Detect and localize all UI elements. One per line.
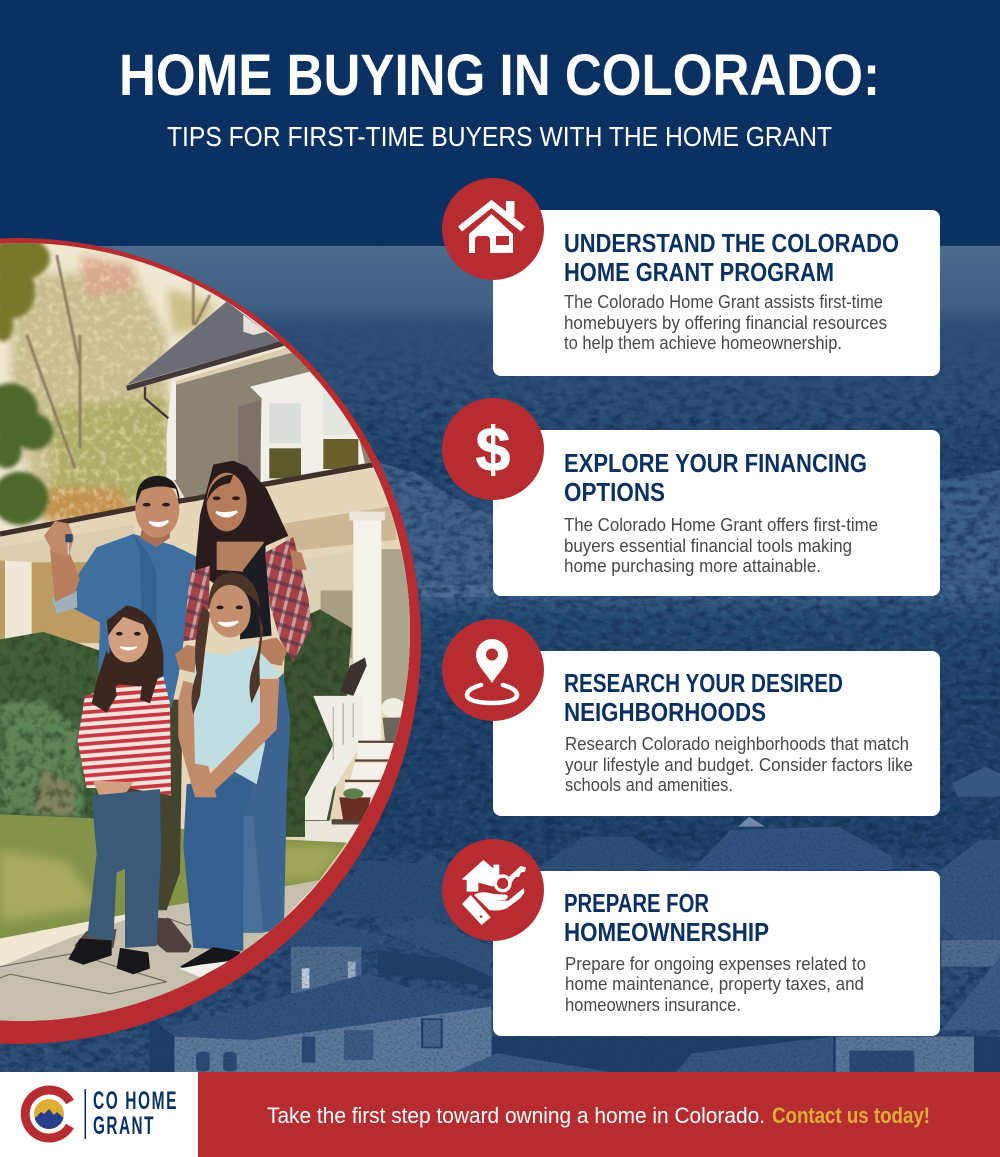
body text: your lifestyle and budget. Consider factors like <box>565 755 913 775</box>
body text <box>564 515 878 576</box>
heading <box>564 228 899 287</box>
heading: UNDERSTAND THE COLORADO <box>564 228 899 258</box>
icon badge: map pin <box>442 619 544 721</box>
heading: RESEARCH YOUR DESIRED <box>564 668 843 698</box>
body text: home maintenance, property taxes, and <box>565 974 864 994</box>
header band <box>0 0 1000 246</box>
heading: EXPLORE YOUR FINANCING <box>564 448 867 478</box>
photo ring <box>0 238 421 1044</box>
logo wordmark: CO HOME <box>93 1087 178 1115</box>
panel: financing options <box>442 398 940 596</box>
body text: Prepare for ongoing expenses related to <box>565 954 866 974</box>
logo mark <box>25 1090 70 1138</box>
family photo in circular frame <box>0 237 430 1040</box>
panel: prepare for homeownership <box>442 839 940 1036</box>
body text <box>564 292 887 353</box>
heading: OPTIONS <box>564 477 665 507</box>
panel: research neighborhoods <box>442 619 940 816</box>
body text: schools and amenities. <box>565 775 733 795</box>
icon badge: dollar sign: $ <box>476 416 510 485</box>
icon badge: house <box>442 178 544 280</box>
body text: home purchasing more attainable. <box>564 556 821 576</box>
logo wordmark: GRANT <box>93 1112 155 1140</box>
footer: logo <box>0 1072 198 1157</box>
footer: call to action <box>198 1072 1000 1157</box>
icon badge: house key in hand <box>442 839 544 941</box>
panel: understand the program <box>442 178 940 376</box>
heading: HOMEOWNERSHIP <box>564 917 769 947</box>
heading <box>564 448 867 507</box>
body text: buyers essential financial tools making <box>564 536 852 556</box>
footer: call to action: Contact us today! <box>772 1103 930 1128</box>
body text: Research Colorado neighborhoods that match <box>565 734 909 754</box>
heading <box>564 668 843 727</box>
body text: homeowners insurance. <box>565 995 741 1015</box>
body text: The Colorado Home Grant offers first-time <box>564 515 878 535</box>
icon badge: dollar sign <box>442 398 544 500</box>
heading: PREPARE FOR <box>564 888 709 918</box>
body text <box>565 954 866 1015</box>
heading: NEIGHBORHOODS <box>564 697 766 727</box>
subtitle: TIPS FOR FIRST-TIME BUYERS WITH THE HOME GRANT <box>167 121 832 152</box>
logo wordmark <box>93 1087 178 1140</box>
footer: call to action: Take the first step toward owning a home in Colorado. <box>267 1103 765 1128</box>
body text: to help them achieve homeownership. <box>564 333 842 353</box>
title: HOME BUYING IN COLORADO: <box>119 43 880 108</box>
body text: The Colorado Home Grant assists first-time <box>564 292 883 312</box>
heading <box>564 888 769 947</box>
body text <box>565 734 913 795</box>
body text: homebuyers by offering financial resources <box>564 313 887 333</box>
background: aerial Colorado landscape and rooftops <box>0 246 1000 1072</box>
heading: HOME GRANT PROGRAM <box>564 257 834 287</box>
